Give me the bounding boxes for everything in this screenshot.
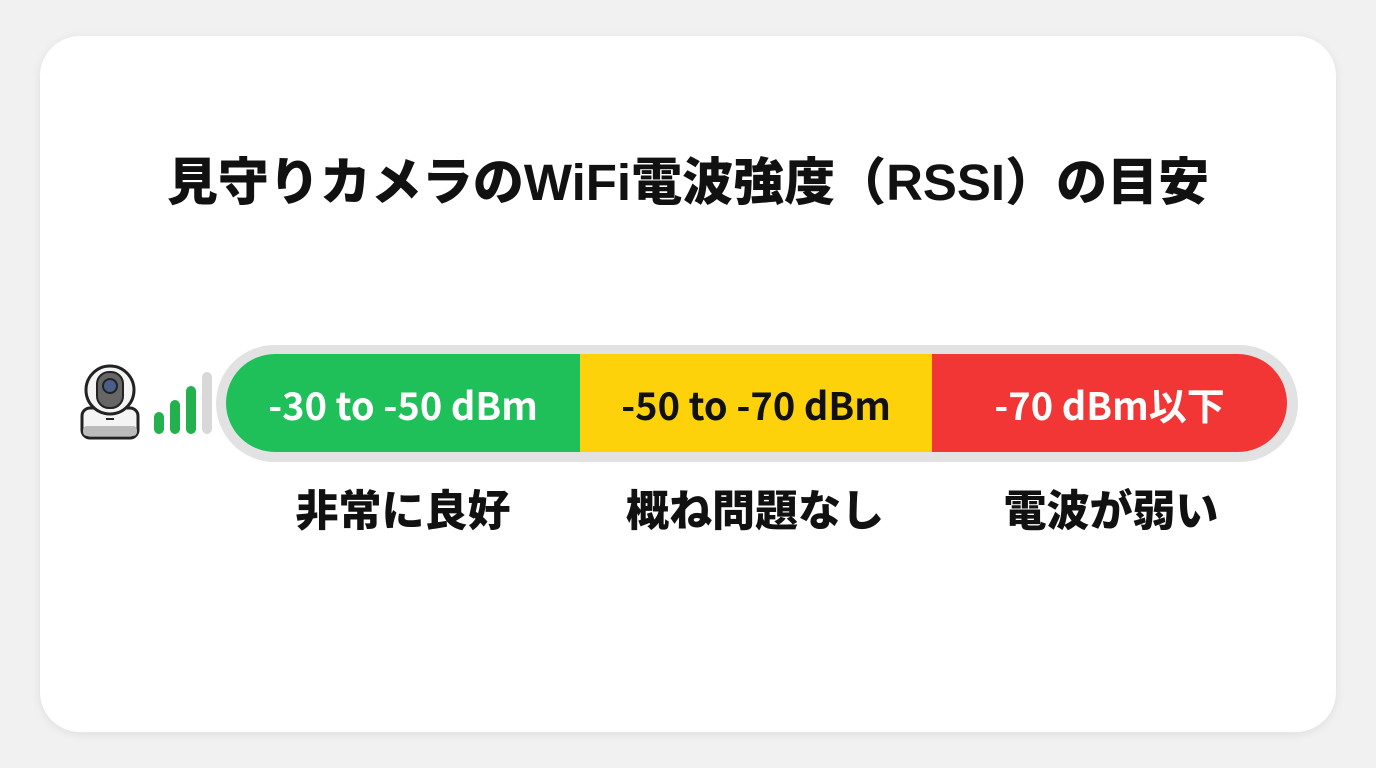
bar: RSSI scale	[226, 354, 1287, 452]
label: ok: 概ね問題なし	[626, 488, 884, 536]
segment: excellent	[226, 354, 580, 452]
icon: signal bars	[154, 372, 212, 434]
title: 見守りカメラのWiFi電波強度（RSSI）の目安	[167, 154, 1209, 211]
segment: ok: -50 to -70 dBm	[621, 376, 891, 430]
label: excellent: 非常に良好	[296, 488, 510, 536]
icon: camera	[80, 364, 140, 440]
segment: weak	[932, 354, 1287, 452]
segment: excellent: -30 to -50 dBm	[268, 376, 538, 430]
segment: weak: -70 dBm以下	[994, 376, 1225, 430]
bar track	[216, 345, 1298, 462]
segment: ok	[580, 354, 932, 452]
label: weak: 電波が弱い	[1004, 488, 1218, 536]
